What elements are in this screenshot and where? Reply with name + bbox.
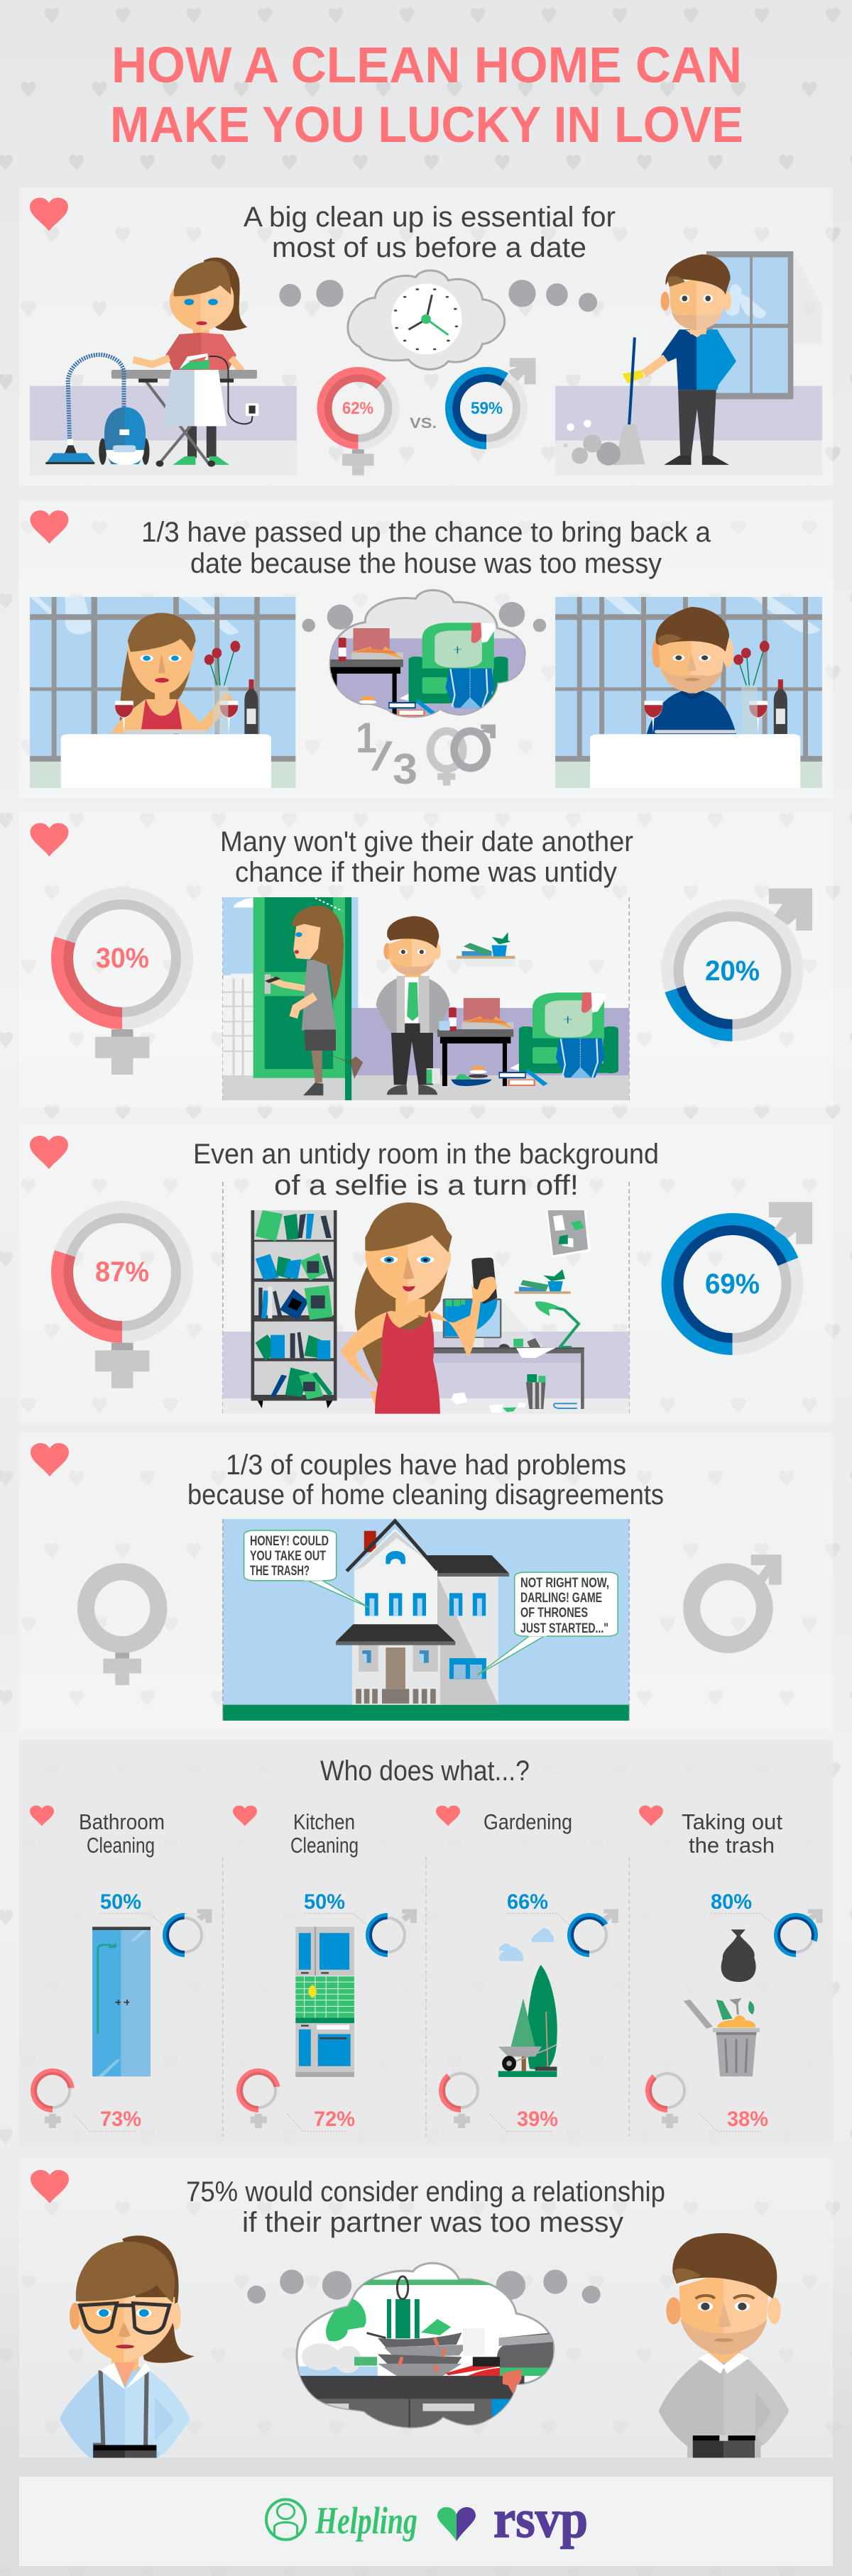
illustration: woman leaving untidy home xyxy=(223,897,629,1100)
logo: Helpling xyxy=(266,2499,417,2542)
logo: rsvp: rsvp xyxy=(493,2489,588,2549)
panel: big clean up before a date xyxy=(19,187,833,486)
female symbol cross xyxy=(342,449,374,476)
men percentages: 80% xyxy=(711,1890,752,1914)
scene: man at restaurant table xyxy=(555,597,822,788)
women percentages: 72% xyxy=(314,2108,355,2131)
column titles: Kitchen xyxy=(293,1809,355,1834)
donut: women 62% xyxy=(321,371,396,446)
fraction: 1/3 xyxy=(356,714,417,793)
column titles: Cleaning xyxy=(87,1833,155,1858)
cloud: dirty kitchen xyxy=(296,2263,555,2431)
column hearts xyxy=(30,1805,663,1826)
heading: Many won't give their date another xyxy=(220,826,633,857)
heading: if their partner was too messy xyxy=(242,2207,623,2238)
speech bubble text: husband: DARLING! GAME xyxy=(520,1591,602,1606)
donut: men 69% xyxy=(667,1220,797,1349)
donut: women 30% xyxy=(57,893,187,1024)
title xyxy=(110,38,743,153)
donut: men 20% xyxy=(667,906,797,1035)
donuts: women xyxy=(33,2070,687,2111)
heading xyxy=(141,517,711,579)
speech bubble text: wife: HONEY! COULD xyxy=(250,1534,329,1549)
column titles: Bathroom xyxy=(79,1809,165,1834)
heading xyxy=(186,2176,665,2238)
fraction: 1/3: 3 xyxy=(393,745,417,793)
woman ironing with vacuum xyxy=(45,258,258,467)
bookshelf xyxy=(251,1210,337,1408)
speech bubble text: husband xyxy=(520,1576,609,1636)
heading: because of home cleaning disagreements xyxy=(187,1479,664,1511)
cloud with clock xyxy=(348,270,505,369)
column titles: Gardening xyxy=(484,1809,572,1834)
icon: heart xyxy=(31,2170,69,2203)
icon: heart xyxy=(31,510,68,544)
icon: heart xyxy=(30,1136,68,1169)
male arrow icons xyxy=(197,1909,823,1923)
woman with phone xyxy=(341,1202,497,1414)
men percentages: 50% xyxy=(100,1890,141,1914)
thought bubbles xyxy=(247,2269,601,2303)
woman with glasses xyxy=(60,2235,195,2457)
speech bubble text: wife: YOU TAKE OUT xyxy=(250,1549,326,1564)
heading: Even an untidy room in the background xyxy=(193,1139,659,1170)
man in grey shirt xyxy=(659,2233,789,2457)
icon: shower xyxy=(92,1926,151,2076)
cloud: messy room xyxy=(326,590,532,720)
women percentages: 73% xyxy=(100,2108,141,2131)
donuts: men xyxy=(165,1915,816,1955)
men percentages: 50% xyxy=(304,1890,345,1914)
speech bubble text: wife xyxy=(250,1534,329,1579)
male symbol arrow xyxy=(769,1202,812,1244)
man with mop xyxy=(564,251,822,466)
fraction: 1/3: / xyxy=(371,734,393,779)
thought bubbles xyxy=(279,280,597,312)
pinboard xyxy=(546,1210,591,1258)
illustration: woman taking selfie in untidy room xyxy=(223,1182,629,1414)
women percentages: 38% xyxy=(727,2108,768,2131)
female symbol cross xyxy=(95,1029,149,1075)
stat: 69%: 69% xyxy=(705,1268,760,1300)
vs label: VS. xyxy=(410,415,437,432)
floor right xyxy=(555,386,822,476)
heading xyxy=(193,1139,659,1201)
stat: 59%: 59% xyxy=(471,399,503,418)
heading: date because the house was too messy xyxy=(190,548,662,579)
stat: 87%: 87% xyxy=(95,1256,149,1288)
female symbol xyxy=(86,1572,158,1685)
heading xyxy=(220,826,633,888)
column titles: the trash xyxy=(689,1833,775,1858)
footer panel xyxy=(19,2477,833,2566)
icon: heart xyxy=(30,197,68,231)
column titles xyxy=(79,1809,782,1858)
male symbol arrow xyxy=(508,358,536,384)
heading: most of us before a date xyxy=(272,232,586,263)
speech bubble text: husband: JUST STARTED..." xyxy=(520,1621,608,1636)
panel: who does what xyxy=(19,1740,833,2146)
women percentages: 39% xyxy=(517,2108,558,2131)
speech bubble text: husband: OF THRONES xyxy=(520,1606,588,1621)
male symbol xyxy=(692,1555,782,1645)
heading: of a selfie is a turn off! xyxy=(274,1170,579,1201)
monitor on desk xyxy=(431,1269,584,1413)
heading: Who does what...? xyxy=(320,1755,530,1787)
icon: garden xyxy=(498,1965,557,2077)
icon: two-tone heart xyxy=(437,2507,476,2541)
heading: 1/3 have passed up the chance to bring back a xyxy=(141,517,711,548)
icon: trash xyxy=(684,1929,760,2076)
fraction: 1/3: 1 xyxy=(356,714,377,762)
icon: heart xyxy=(31,823,68,857)
women percentages xyxy=(100,2108,768,2131)
heading: 1/3 of couples have had problems xyxy=(226,1449,626,1481)
column titles: Cleaning xyxy=(290,1833,359,1858)
heading: A big clean up is essential for xyxy=(244,202,616,233)
floor left xyxy=(30,386,297,476)
panel: ending a relationship xyxy=(19,2159,833,2457)
scene: woman at restaurant table xyxy=(30,597,295,788)
male symbol arrow xyxy=(769,889,812,931)
male symbol xyxy=(454,725,496,768)
female symbol xyxy=(430,731,463,786)
icon: kitchen xyxy=(295,1926,354,2077)
panel: passed up the chance xyxy=(19,500,833,799)
illustration: house with speech bubbles xyxy=(223,1519,629,1721)
speech bubble text: wife: THE TRASH? xyxy=(250,1564,310,1579)
heading xyxy=(187,1449,664,1511)
heading: chance if their home was untidy xyxy=(235,857,617,888)
column titles: Taking out xyxy=(682,1809,782,1834)
stat: 20%: 20% xyxy=(705,955,760,987)
stat: 62%: 62% xyxy=(342,399,373,418)
panel: no second chance xyxy=(19,812,833,1107)
icon: clouds xyxy=(499,1928,554,1961)
icon: heart xyxy=(31,1443,69,1476)
female cross icons xyxy=(45,2114,678,2128)
thought bubbles xyxy=(302,602,546,632)
men percentages: 66% xyxy=(507,1890,548,1914)
stat: 30%: 30% xyxy=(96,943,149,974)
donut: women 87% xyxy=(57,1207,187,1337)
heading: 75% would consider ending a relationship xyxy=(186,2176,665,2208)
title: MAKE YOU LUCKY IN LOVE xyxy=(110,97,743,153)
heading xyxy=(244,202,616,263)
female symbol cross xyxy=(95,1343,149,1388)
panel: couples disagreements xyxy=(19,1432,833,1731)
donut: men 59% xyxy=(449,371,524,446)
title: HOW A CLEAN HOME CAN xyxy=(111,38,742,94)
speech bubble text: husband: NOT RIGHT NOW, xyxy=(520,1576,609,1591)
panel: untidy selfie xyxy=(19,1124,833,1423)
men percentages xyxy=(100,1890,752,1914)
logo: Helpling: Helpling xyxy=(315,2499,417,2542)
